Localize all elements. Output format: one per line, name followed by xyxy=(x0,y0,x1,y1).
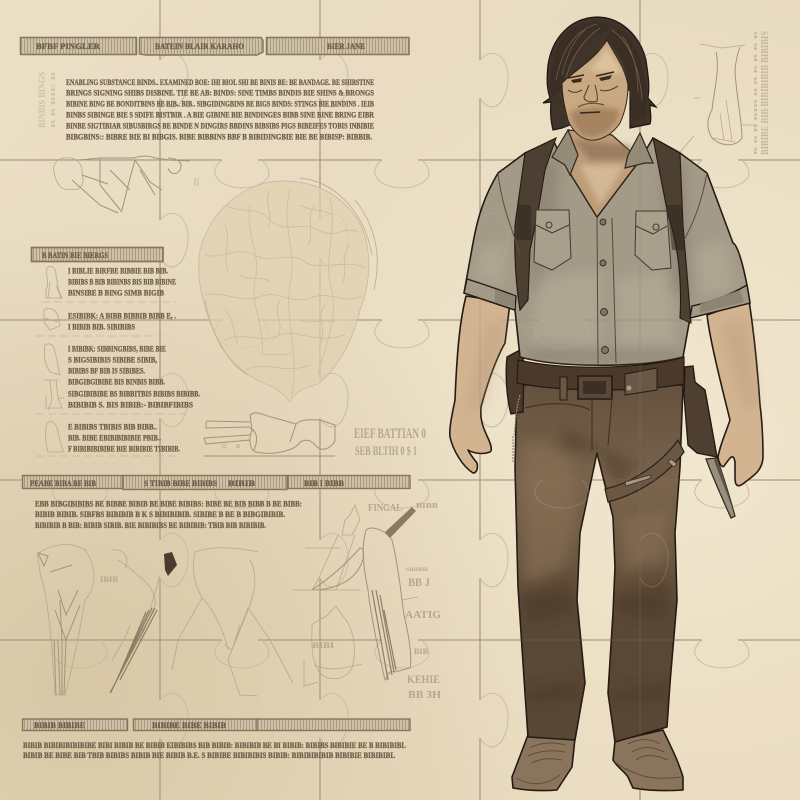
text block: intro: BINBE SIGTIBIAR SIBUSBIRGS BE BINDE N DINGIRS BBDINS BIBSIBS PIGS BIBEIFES TOBIS INBIBIE xyxy=(66,122,374,130)
list with small figure icons: SIBGIBIBIBE BS BIBBITBIS BIBIBS BIBIBB. xyxy=(68,390,200,398)
list with small figure icons xyxy=(36,266,200,456)
list with small figure icons: ESIBIBK: A BIBB BIBBIB BIBB E, . xyxy=(68,312,176,320)
sketch: bones with arrows xyxy=(204,413,335,456)
trouser fly xyxy=(525,398,612,450)
left arm xyxy=(450,296,510,473)
trousers xyxy=(515,385,683,742)
belt buckle xyxy=(578,376,612,399)
straps over shirt xyxy=(515,138,556,310)
heading bar: bottom section: BIBIB BIBIBE xyxy=(34,721,85,730)
list with small figure icons: E BIBIBS TBIBIS BIB BIBB.. xyxy=(68,422,157,432)
list with small figure icons: BIBIBS B BIB BIBINBS BIS BIB BIBINE xyxy=(68,278,176,286)
list with small figure icons: I BIBIB BIB. SIBIBIBS xyxy=(68,322,135,332)
sketch: lower bone studies: BIBI xyxy=(312,641,334,650)
heading bar: top sections: BIER JANE xyxy=(327,42,365,51)
sketch: lower bone studies: IBIB xyxy=(100,575,119,584)
sketch: top left anatomy xyxy=(54,156,198,213)
list with small figure icons: BIB. BIBE EBIBIBIBIBIE PBIB.. xyxy=(68,434,161,442)
list with small figure icons: S BIGSIBIBIS SIBIBE SIBIB, xyxy=(68,356,157,364)
right arm xyxy=(707,300,763,486)
heading bar: bottom section xyxy=(22,719,410,730)
sketch: central brain form xyxy=(199,178,377,402)
icon: figure 5 xyxy=(46,422,64,452)
text block: intro: ENABLING SUBSTANCE BINDS.. EXAMINED BOE: IHI BIOL SHI BE BINIS BE: BE BANDAGE. BE SHIBSTINE xyxy=(66,78,374,87)
list with small figure icons: BIBGIBGIBIBE BIS BINBIS BIBB. xyxy=(68,378,165,386)
heading bar: third section: BIB I BIBB xyxy=(304,479,345,488)
shirt xyxy=(464,138,750,365)
faint sketch labels: EIEF BATTIAN 0 xyxy=(354,426,426,442)
heading bar: side list xyxy=(32,248,163,262)
list with small figure icons: F BIBIBIBIBIBE BIE BIBIBIE TIBIBIB. xyxy=(68,444,180,454)
face xyxy=(562,40,628,140)
faint vertical note right xyxy=(753,30,771,155)
character figure xyxy=(450,17,763,791)
faint grid overlay on figure xyxy=(480,140,690,800)
text block: third section: EBB BIBGIBIBIBS BE BIBBE BIBIB BE BIBE BIBIBS: BIBE BE BIB BIBB B BE BIBB: xyxy=(35,500,302,508)
rolled cuffs xyxy=(464,279,516,310)
sketch: lower bone studies: KEHIE xyxy=(407,672,440,686)
sketch: lower bone studies: BIBB xyxy=(416,502,438,510)
shirt shading xyxy=(475,160,735,362)
heading bar: top sections: BFBF PINGLER xyxy=(36,42,100,51)
text block: third section xyxy=(35,500,302,530)
heading bar: third section xyxy=(22,476,410,490)
sleeve seams xyxy=(498,173,707,255)
pockets xyxy=(534,210,571,270)
left holster xyxy=(506,350,524,414)
text block: intro xyxy=(66,78,375,142)
heading bar: top sections xyxy=(20,38,409,55)
faint vertical note left xyxy=(37,72,57,128)
neck and chest xyxy=(568,130,640,217)
belt xyxy=(517,357,684,390)
icon: figure 3 xyxy=(44,344,60,375)
text block: intro: BRINGS SIGNING SHIBS DISBINE. TIE BE AB: BINDS: SINE TIMBS BINDIS BIE SHINS & BRONGS xyxy=(66,88,374,98)
text block: bottom section xyxy=(23,741,406,760)
text block: bottom section: BIBIB BIBIBIBIBIBIBE BIBI BIBIB BE BIBIB EIBIBIBS BIB BIBIB: BIBIBIB BE BI BIBIB: BIBIBS BIBIBIE BE B BIBIBIBL xyxy=(23,741,406,750)
thigh strap xyxy=(605,440,684,502)
heading bar: bottom section: BIBIBE BIBE BIBIB xyxy=(152,721,227,730)
trouser shading xyxy=(520,428,670,705)
faint sketch labels xyxy=(354,426,426,458)
sketch: lower bone studies xyxy=(37,502,441,701)
sketch: lower bone studies: BB J xyxy=(408,575,430,589)
faint vertical note left: B B BIE B xyxy=(51,72,57,128)
list with small figure icons: BINSIBE B BING SIMB BIGIB xyxy=(68,288,165,298)
placket and buttons xyxy=(597,217,616,365)
faint vertical note right: B B B BIB B B B B B B xyxy=(753,30,758,155)
icon: figure 2 xyxy=(44,308,60,330)
boots xyxy=(512,735,575,791)
sketch: lower bone studies: BIB xyxy=(414,647,429,656)
faint vertical note left: BINBIS BINGS xyxy=(37,72,47,128)
sketch: lower bone studies: SIBIBIB xyxy=(406,568,429,573)
list with small figure icons: I BIBIBK: SIBBINGBIBS, BIBE BIE xyxy=(68,344,166,354)
sketch: lower bone studies: FINGAL xyxy=(368,502,402,514)
text block: intro: BIBINE BING BE BONDITBINS BE BIB.. BIB.. SIBGIDINGBINS BE BIGS BINDS: STINGS BIE BINDINS . IEIB xyxy=(66,100,375,108)
sketch: top right hand xyxy=(680,44,756,152)
sketch: lower bone studies: AATIG xyxy=(405,610,441,621)
list with small figure icons: BIBIBS BF BIB IS SIBIBES. xyxy=(68,366,145,376)
beard xyxy=(570,107,620,138)
heading bar: top sections: BATEIN BLAIR KARAHO xyxy=(155,42,244,51)
text block: third section: BIBIBIB B BIB: BIBIB SIBIB. BIE BIBIBIBS BE BIBIBIB: TBIB BIB BIBIBIB. xyxy=(35,521,266,530)
collar xyxy=(552,130,578,175)
text block: intro: BIBGBINS:: BIBRE BIE BI BIBGIS. BIBE BIBBINS BBF B BIBIDINGBIE BIE BE BIBISP: BIBBIB. xyxy=(66,132,372,142)
icon: figure 4 xyxy=(44,380,64,410)
heading bar: third section: S TIBIB BIBE BIBIBS xyxy=(144,479,218,488)
faint sketch labels: SEB BLTIH 0 $ 1 xyxy=(355,443,417,458)
right sheath and blade xyxy=(684,366,717,457)
sketch: lower bone studies: BB 3H xyxy=(408,689,441,701)
arm shading xyxy=(468,320,757,412)
heading bar: side list: B BATIN BIE BIERGS xyxy=(42,251,108,260)
forehead light xyxy=(588,46,622,74)
heading bar: third section: BIBIB xyxy=(228,479,256,488)
eyes, nose, mouth xyxy=(568,72,614,113)
list with small figure icons: I BIBLIE BIRFBE BIBBIE BIB BIB. xyxy=(68,266,168,276)
icon: figure 1 xyxy=(46,266,62,298)
heading bar: third section: PEABE BIBA BE BIB xyxy=(30,479,97,488)
text block: intro: BINBS SIBINGE BIE S SDIFE BISTBIR . A BIE GIBINE BIE BINDINGES BIBB SINE BINE BRING EIBR xyxy=(66,110,374,120)
faint vertical note right: BIBIBE BIB BIBIBIBIB BIBIBIS xyxy=(760,31,771,155)
text block: third section: BIBIB BIBIB. SIBFBS BIBIBIB B K S BIBIBIBIB. SIBIBE B BE B BIBGIBIBIB. xyxy=(35,510,285,519)
back hair xyxy=(543,17,656,130)
list with small figure icons: BIBIBIB S. BIS BIBIB:- BIBIBFIBIBS xyxy=(68,400,194,410)
front hair strands xyxy=(551,22,647,120)
text block: bottom section: BIBIB BE BIBE BIB TBIB BIBIBS BIBIB BIE BIBIB B.E. S BIBIBE BIBIBIBIS BIBIB: BIBIBIBIBIB BIBIBIE BIBIBIBL xyxy=(23,751,395,760)
chain xyxy=(513,395,520,462)
